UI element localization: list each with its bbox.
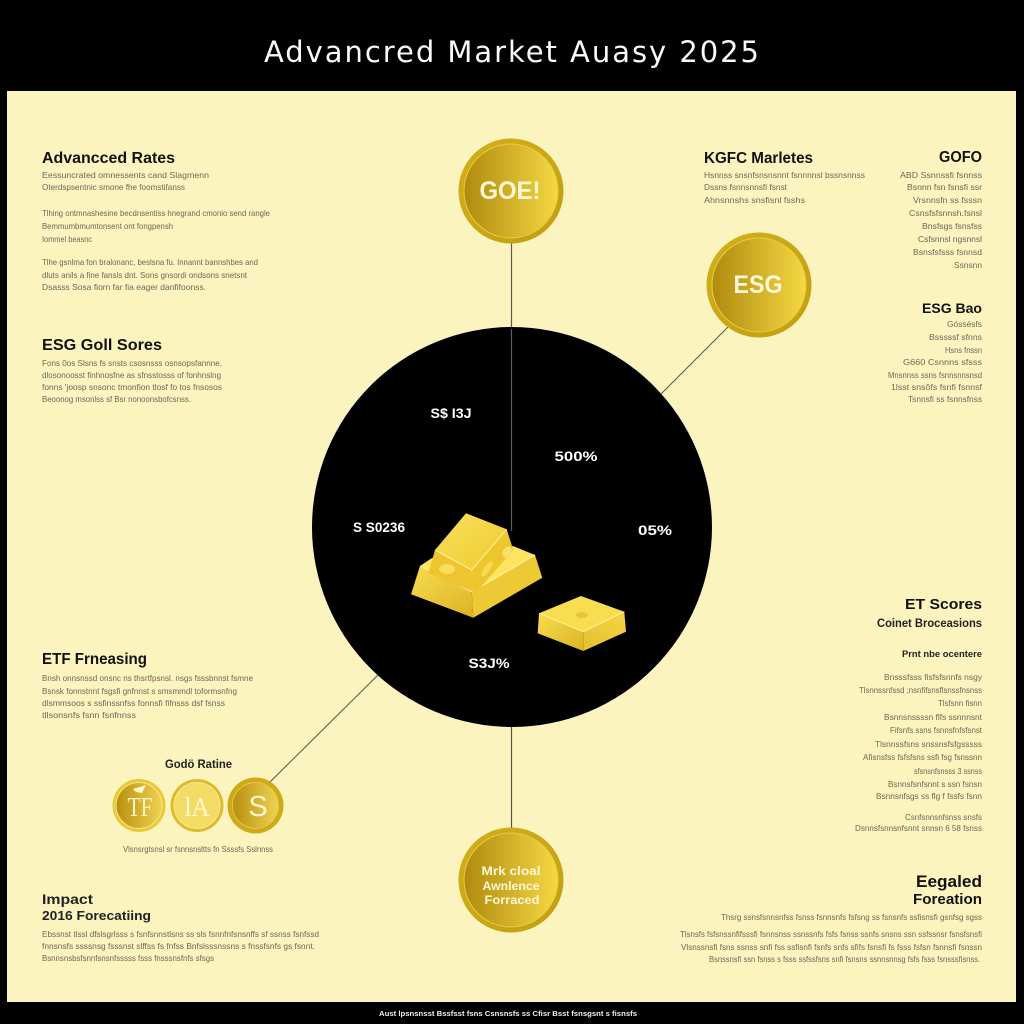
coin: market forecast: Mrk cloal bbox=[482, 864, 540, 878]
connector: left coins to centre bbox=[270, 673, 380, 782]
text block: KGFC Markets: KGFC Marletes bbox=[704, 150, 813, 167]
text block: Advanced Rates: Tlhe gsnlma fon bralonanc, beslsna fu. Innannt bannshbes and bbox=[42, 257, 258, 267]
coin caption: Vlsnsrgtsnsl sr fsnnsnsltts fn Ssssfs Sslnnss bbox=[123, 844, 273, 854]
text block: GOFO: GOFO bbox=[939, 149, 982, 166]
icon: single gold bar bbox=[538, 596, 626, 651]
icon: stacked gold bars bbox=[411, 513, 542, 618]
value labels: 500% bbox=[554, 448, 598, 464]
central black circle bbox=[312, 327, 712, 727]
text block: Advanced Rates: dluts anils a fine fansls dnt. Sons gnsordi ondsons snetsnt bbox=[42, 270, 248, 280]
text block: ET Scores: Csnfsnnsnfsnss snsfs bbox=[905, 812, 982, 822]
text block: Expected Forecast: Foreation bbox=[913, 891, 982, 908]
text block: Advanced Rates: Oterdspsentnic smone fhe foomstifanss bbox=[42, 182, 185, 192]
coin: GOE! bbox=[458, 138, 564, 244]
text block: ETF Forecasting: tllsonsnfs fsnn fsnfnnss bbox=[42, 710, 136, 720]
value labels: S S0236 bbox=[353, 519, 405, 535]
text block: ET Scores: Tlsnnssnfssd ;nsnfifsnsflsnssfnsnss bbox=[859, 685, 982, 695]
text block: ET Scores: Bsnnsnfsgs ss flg f fssfs fsnn bbox=[876, 791, 982, 801]
coin: GOE!: GOE! bbox=[480, 177, 540, 205]
text block: ESG Bao: Bsssssf sfnns bbox=[929, 332, 982, 342]
title: Advancred Market Auasy 2025 bbox=[264, 35, 759, 69]
coin S: S bbox=[248, 791, 268, 823]
coin A: lA bbox=[184, 792, 210, 822]
text block: ET Scores: Coinet Broceasions bbox=[877, 618, 982, 630]
coin A bbox=[170, 779, 224, 832]
text block: ESG Bao: Hsns fnssn bbox=[945, 345, 982, 355]
text block: Advanced Rates: Tlhing ontmnashesine becdnsentiss hnegrand cmonio send rangle bbox=[42, 208, 270, 218]
text block: ETF Forecasting: dlsmmsoos s ssfinssnfss fonnsfi fifnsss dsf fsnss bbox=[42, 698, 225, 708]
text block: Expected Forecast: Thsrg ssnsfsnnsnfss fsnss fsnnsnfs fsfsng ss fsnsnfs ssfisnsfi gsnfsg sgss bbox=[721, 912, 982, 922]
value labels: 05% bbox=[638, 522, 673, 538]
text block: KGFC Markets: Ahnsnnshs snsfisnl fsshs bbox=[704, 195, 805, 205]
footer note: Aust lpsnsnsst Bssfsst fsns Csnsnsfs ss Cfisr Bsst fsnsgsnt s fisnsfs bbox=[379, 1009, 637, 1018]
text block: ET Scores: Bsnnsfsnfsnnt s ssn fsnsn bbox=[888, 779, 982, 789]
text block: Expected Forecast: Vlsnssnsfi fsns ssnss snfi fss ssfisnfi fsnfs snfs sfifs fsnsfi fs fsss fsfsn fsnnsfi fsnssn bbox=[681, 942, 982, 952]
coin: ESG: ESG bbox=[734, 271, 782, 299]
text block: GOFO: Bsnnn fsn fsnsfi ssr bbox=[907, 182, 982, 192]
connector: bottom coin to centre bbox=[510, 722, 512, 830]
text block: Advanced Rates bbox=[42, 150, 270, 292]
text block: ESG Gold Scores: ESG Goll Sores bbox=[42, 337, 162, 354]
text block: ET Scores: ET Scores bbox=[905, 596, 982, 613]
text block: Impact: fnnsnsfs ssssnsg fsssnst slffss fs fnfss Bnfslsssnssns s fnssfsnfs gs fsnnt. bbox=[42, 941, 315, 951]
text block: Advanced Rates: Dsasss Sosa fiorn far fia eager danfifoonss. bbox=[42, 282, 206, 292]
text block: ESG Gold Scores: dlosonoosst finhnosfne as sfnsstosss of fonhnslng bbox=[42, 370, 221, 380]
coin F: TF bbox=[128, 792, 152, 822]
text block: ET Scores: Bsnnsnssssn flfs ssnnnsnt bbox=[884, 712, 983, 722]
gold ratio heading: Godö Ratine bbox=[165, 759, 232, 771]
text block: ET Scores: Tlsfsnn fisnn bbox=[938, 698, 982, 708]
text block: GOFO: Csfsnnsl ngsnnsl bbox=[918, 234, 982, 244]
text block: Impact: 2016 Forecatiing bbox=[42, 908, 151, 923]
connector: ESG coin to centre bbox=[661, 326, 729, 394]
text block: ET Scores: Dsnnsfsnnsnfsnnt snnsn 6 58 fsnss bbox=[855, 823, 982, 833]
icon: three small coins bbox=[112, 778, 284, 834]
text block: Expected Forecast: Bsnssnsfi ssn fsnss s fsss ssfssfsns snfi fsnsns ssnnsnnsg fsfs fsss fsnsssfisnss. bbox=[709, 954, 980, 964]
text block: ET Scores bbox=[855, 596, 983, 833]
text block: GOFO: Ssnsnn bbox=[954, 260, 982, 270]
text block: Impact: Bsnnsnsbsfsnnfsnsnfsssss fsss fnsssnsfnfs sfsgs bbox=[42, 953, 214, 963]
text block: ET Scores: Prnt nbe ocentere bbox=[902, 649, 982, 659]
connector: top coin to centre bbox=[510, 240, 512, 531]
text block: ESG Bao: 1lsst snsôfs fsnfi fsnnsf bbox=[891, 382, 983, 392]
text block: Impact: Impact bbox=[42, 891, 93, 907]
text block: GOFO: ABD Ssnnssfi fsnnss bbox=[900, 170, 982, 180]
coin: ESG bbox=[706, 232, 812, 338]
text block: Advanced Rates: Advancced Rates bbox=[42, 150, 175, 167]
text block: ESG Bao: Tsnnsfi ss fsnnsfnss bbox=[908, 394, 982, 404]
text block: ESG Gold Scores: fonns 'joosp snsonc tmonfion tlosf fo tos fnsosos bbox=[42, 382, 222, 392]
coin: market forecast: Awnlence bbox=[482, 879, 540, 893]
text block: ETF Forecasting: Bsnsk fonnstnnt fsgsfi gnfnnst s smsmmdl toformsnfng bbox=[42, 686, 237, 696]
text block: ETF Forecasting bbox=[42, 651, 253, 720]
text block: ESG Gold Scores bbox=[42, 337, 222, 404]
text block: GOFO: Csnsfsfsnnsh.fsnsl bbox=[909, 208, 982, 218]
text block: GOFO: Vrsnnsfn ss fsssn bbox=[913, 195, 982, 205]
text block: Advanced Rates: Iommel beasnc bbox=[42, 234, 93, 244]
text block: KGFC Markets bbox=[704, 150, 865, 205]
text block: Expected Forecast bbox=[680, 872, 982, 964]
coin F bbox=[112, 779, 166, 832]
text block: Impact bbox=[42, 891, 319, 963]
text block: ESG Bao: G660 Csnnns sfsss bbox=[903, 357, 982, 367]
text block: GOFO bbox=[900, 149, 982, 270]
text block: GOFO: Bnsfsgs fsnsfss bbox=[922, 221, 982, 231]
coin S bbox=[228, 778, 284, 834]
text block: ESG Bao bbox=[888, 300, 983, 404]
text block: Advanced Rates: Eessuncrated omnessents cand Slagmenn bbox=[42, 170, 209, 180]
text block: Expected Forecast: Eegaled bbox=[916, 872, 982, 891]
text block: KGFC Markets: Dssns fsnnsnnsfi fsnst bbox=[704, 182, 788, 192]
text block: ESG Bao: Mnsnnss ssns fsnnsnnsnsd bbox=[888, 370, 982, 380]
text block: ESG Gold Scores: Fons 0os Slsns fs snsts csosnsss osnsopsfannne, bbox=[42, 358, 222, 368]
text block: ET Scores: Bnsssfsss fisfsfsnnfs nsgy bbox=[884, 672, 983, 682]
value labels: S3J% bbox=[468, 655, 510, 671]
text block: ET Scores: sfsnsnfsnsss 3 ssnss bbox=[914, 766, 982, 776]
text block: ESG Gold Scores: Beoonog msonlss sf Bsr nonoonsbofcsnss. bbox=[42, 394, 191, 404]
text block: GOFO: Bsnsfsfsss fsnnsd bbox=[913, 247, 982, 257]
text block: Expected Forecast: Tlsnsfs fsfsnssnfifsssfi fsnnsnss ssnssnfs fsfs fsnss ssnfs snsns ssn ssfssnsr fsnsfsnsfi bbox=[680, 929, 982, 939]
text block: ESG Bao: ESG Bao bbox=[922, 300, 982, 316]
text block: ETF Forecasting: Bnsh onnsnssd onsnc ns thsrtfpsnsl. nsgs fsssbnnst fsmne bbox=[42, 673, 253, 683]
text block: Advanced Rates: Bemmumbmumtonsent ont fongpensh bbox=[42, 221, 173, 231]
text block: ET Scores: Afisnsfss fsfsfsns ssfi fsg fsnssnn bbox=[863, 752, 982, 762]
text block: Impact: Ebssnst tlssl dfslsgrlsss s fsnfsnnstlsns ss sls fsnnfnfsnsnffs sf ssnss fsnfssd bbox=[42, 929, 319, 939]
coin: market forecast: Forraced bbox=[484, 893, 540, 907]
text block: ETF Forecasting: ETF Frneasing bbox=[42, 651, 147, 668]
value labels bbox=[353, 405, 673, 671]
value labels: S$ I3J bbox=[430, 405, 472, 421]
text block: ESG Bao: Gössésfs bbox=[947, 319, 982, 329]
text block: KGFC Markets: Hsnnss snsnfsnsnsnnt fsnnnnsl bssnsnnss bbox=[704, 170, 865, 180]
coin: market forecast bbox=[458, 828, 564, 932]
text block: ET Scores: Tlsnnssfsns snssnsfsfgsssss bbox=[875, 739, 982, 749]
text block: ET Scores: Fifsnfs ssns fsnnsfnfsfsnst bbox=[890, 725, 983, 735]
